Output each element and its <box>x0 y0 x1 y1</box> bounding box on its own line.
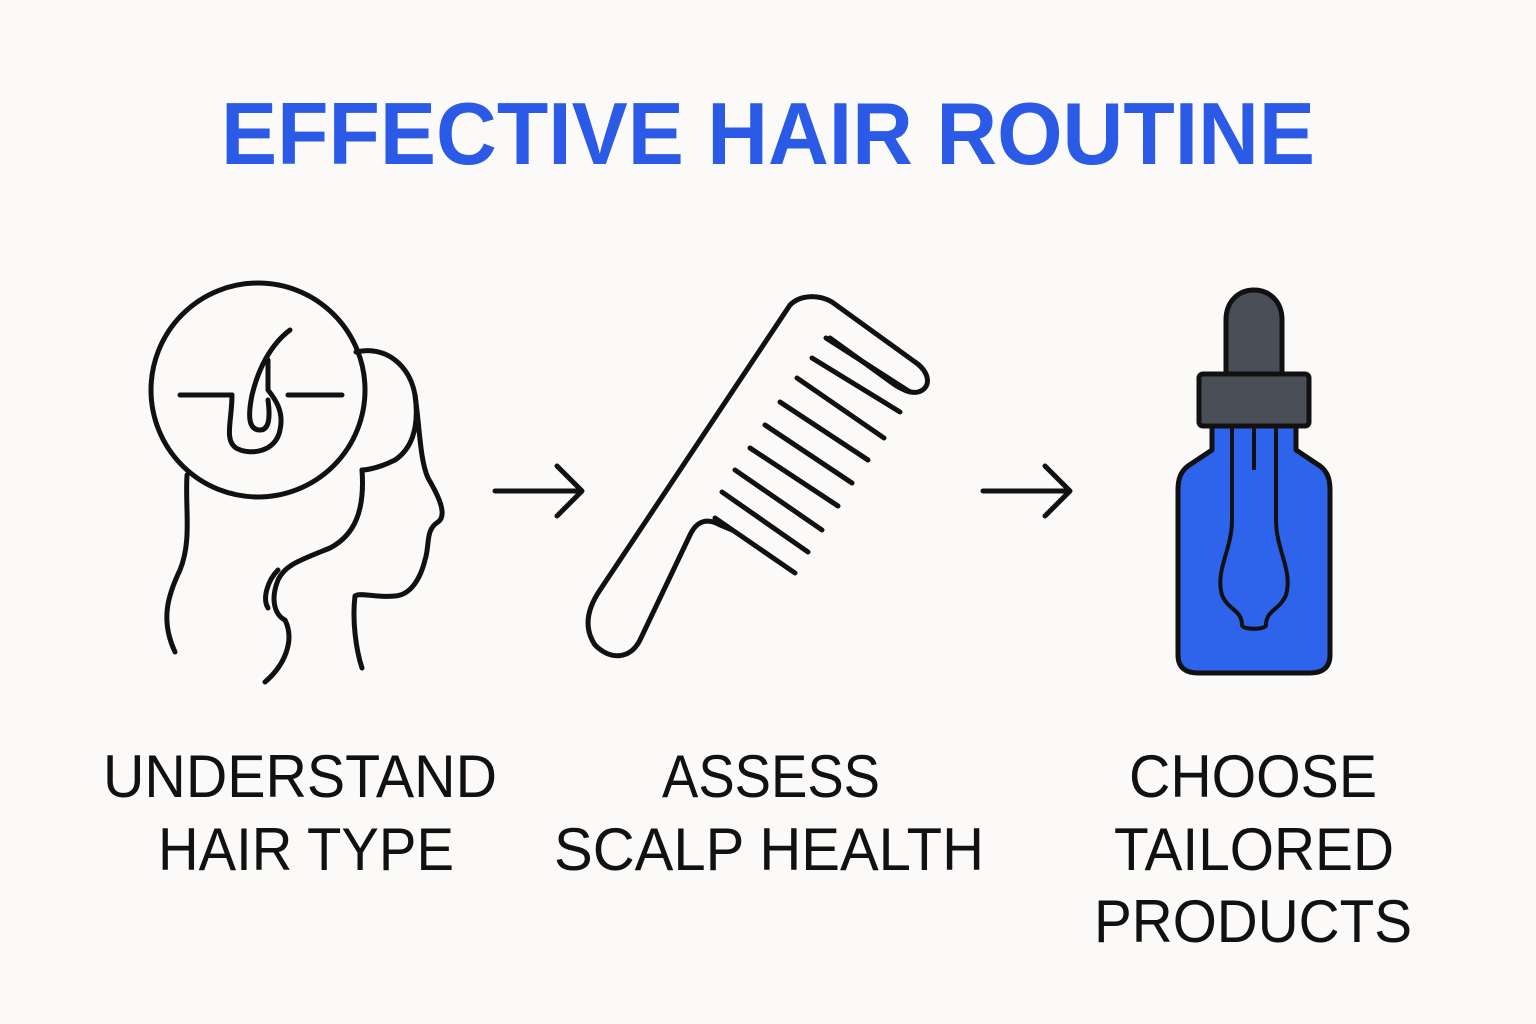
label: choose tailored products: PRODUCTS <box>1094 888 1412 955</box>
label: assess scalp health: SCALP HEALTH <box>554 816 984 883</box>
title: EFFECTIVE HAIR ROUTINE <box>221 84 1315 183</box>
label: assess scalp health: ASSESS <box>662 743 880 810</box>
label: choose tailored products: CHOOSE <box>1129 743 1377 810</box>
label: choose tailored products: TAILORED <box>1114 816 1394 883</box>
label: understand hair type <box>103 743 497 883</box>
label: choose tailored products <box>1094 743 1412 955</box>
arrow 2 <box>983 466 1070 516</box>
label: understand hair type: HAIR TYPE <box>158 816 454 883</box>
icon: comb <box>588 297 927 656</box>
icon: head with hair follicle <box>151 283 442 682</box>
arrow 1 <box>495 466 582 516</box>
label: assess scalp health <box>554 743 984 883</box>
icon: dropper bottle <box>1178 290 1330 673</box>
label: understand hair type: UNDERSTAND <box>103 743 497 810</box>
